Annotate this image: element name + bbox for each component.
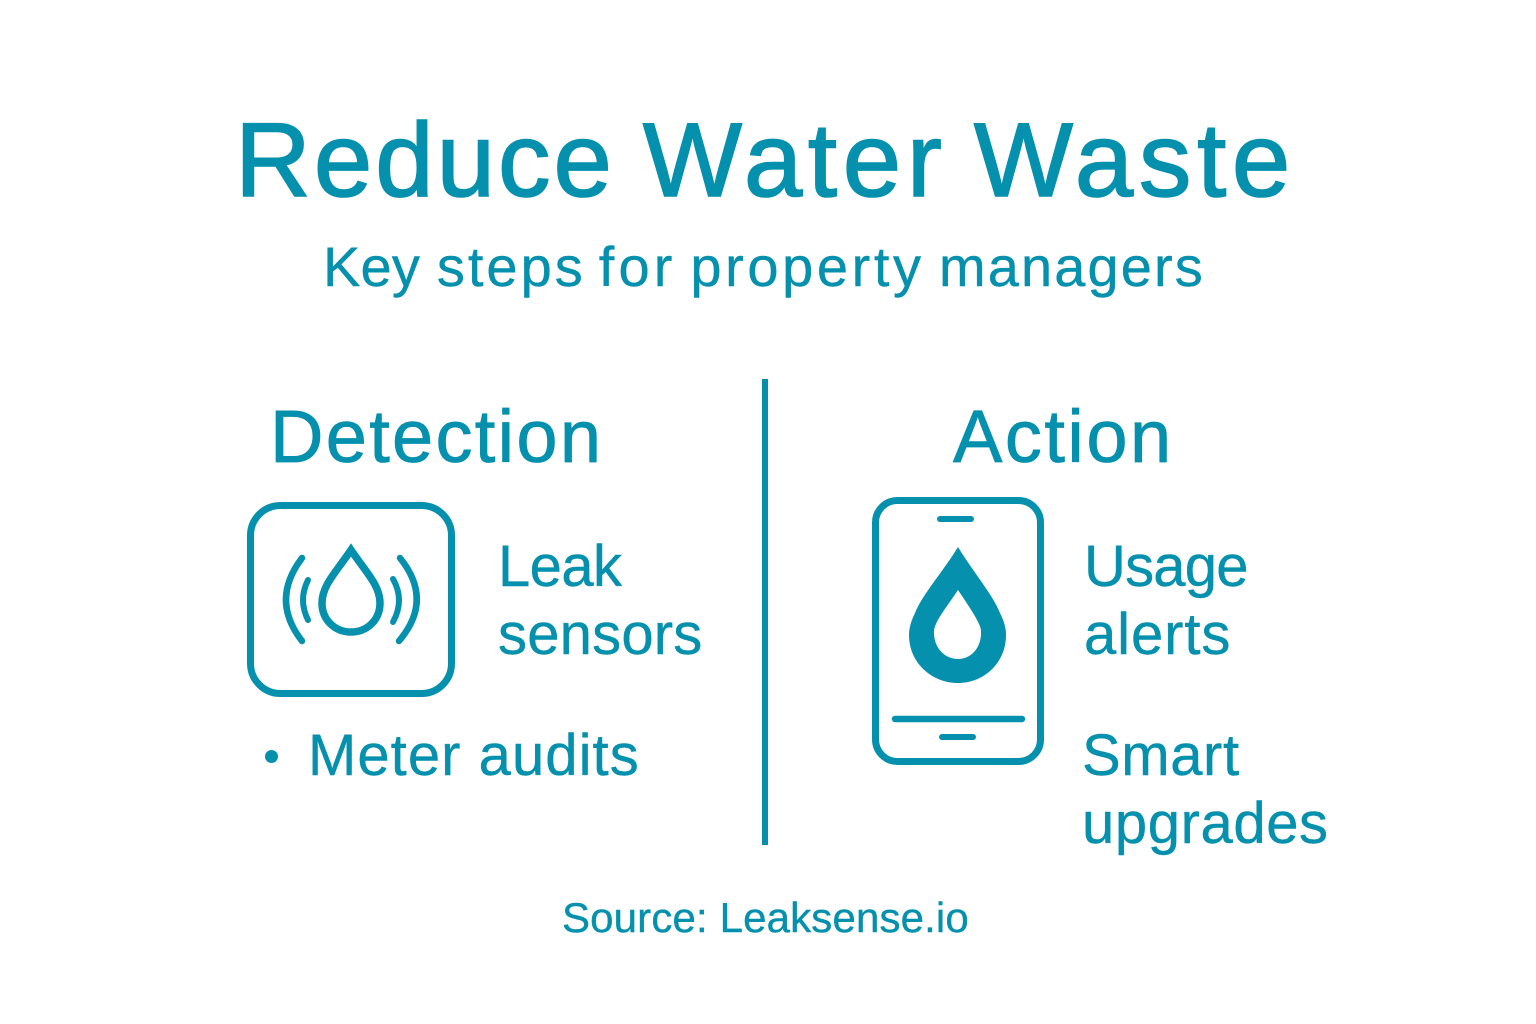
subtitle: Key steps for property managers — [323, 235, 1205, 298]
label: usage alerts: Usage — [1084, 534, 1248, 599]
title: Reduce Water Waste — [235, 102, 1296, 219]
label: leak sensors: Leak — [498, 534, 621, 599]
panel: detection — [247, 395, 702, 788]
label: smart upgrades — [1082, 723, 1329, 856]
label: leak sensors: sensors — [498, 602, 702, 667]
label: smart upgrades: Smart — [1082, 723, 1240, 788]
label: usage alerts — [1084, 534, 1248, 667]
label: usage alerts: alerts — [1084, 602, 1231, 667]
heading: detection: Detection — [270, 395, 603, 478]
heading: action: Action — [953, 395, 1174, 478]
source: Source: Leaksense.io — [562, 894, 969, 941]
icon: leak sensor — [247, 502, 455, 697]
icon: phone with water drop — [872, 497, 1044, 765]
label: smart upgrades: upgrades — [1082, 791, 1329, 856]
panel: action — [872, 395, 1329, 856]
label: leak sensors — [498, 534, 702, 667]
bullet item: meter audits: Meter audits — [308, 723, 640, 788]
divider — [762, 379, 768, 845]
